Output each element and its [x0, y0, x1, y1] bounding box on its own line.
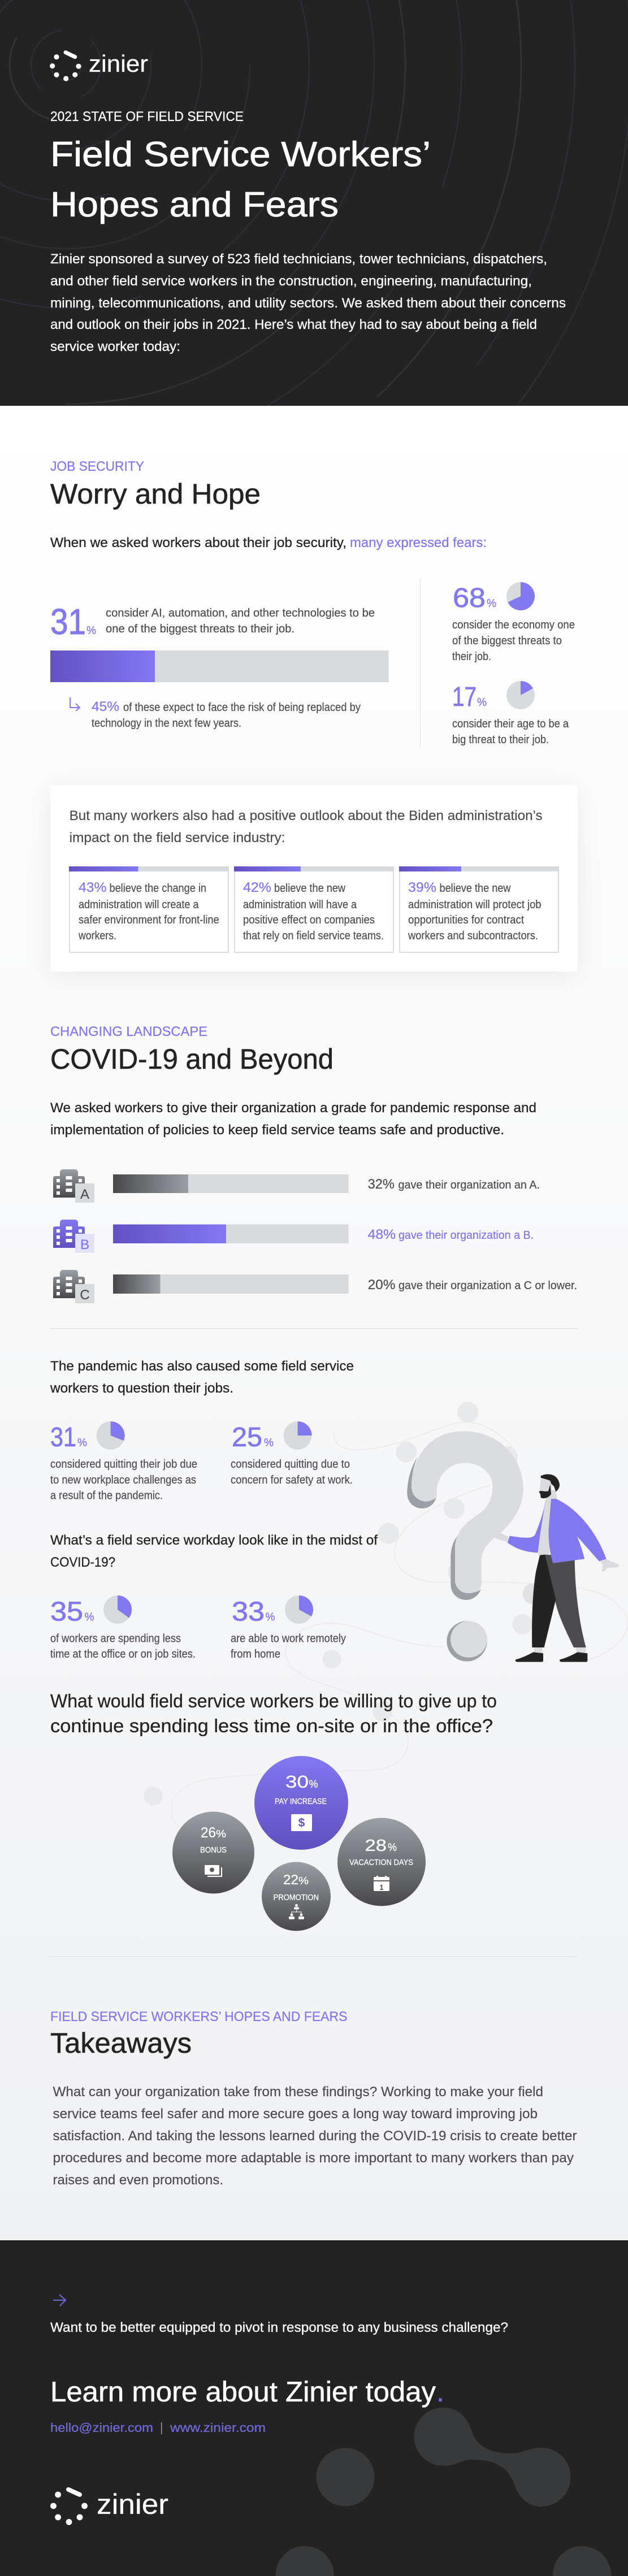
paragraph: satisfaction. And taking the lessons learned during the COVID-19 crisis to create better [53, 2128, 577, 2144]
subheading: workday: COVID-19? [50, 1555, 115, 1570]
stat: 68 percent [452, 582, 575, 663]
stat: 31 percent [50, 601, 375, 642]
stat: 17 percent [452, 681, 569, 746]
label: grade C: gave their organization a C or lower. [399, 1280, 577, 1292]
bubble: bonus: 26 [201, 1825, 216, 1841]
stat: 35 percent: % [85, 1611, 94, 1623]
bar chart: 31 percent [50, 650, 389, 682]
lead text: When we asked workers about their job security, [50, 535, 347, 550]
logo: zinier [50, 50, 148, 81]
section label: CHANGING LANDSCAPE [50, 1024, 207, 1039]
stat: 25 percent quitting: 25 [232, 1423, 262, 1452]
stat: 31 percent quitting: a result of the pandemic. [50, 1490, 163, 1502]
stat: 31 percent: 31 [50, 601, 86, 642]
intro paragraph: mining, telecommunications, and utility sectors. We asked them about their concerns [50, 296, 566, 311]
question mark [407, 1431, 523, 1662]
stat: 68 percent: 68 [453, 583, 486, 613]
section label: FIELD SERVICE WORKERS’ HOPES AND FEARS [50, 2009, 347, 2024]
stat: 68 percent: consider the economy one [452, 619, 575, 631]
stat: 31 percent quitting: % [77, 1437, 87, 1449]
stat: 68 percent: % [487, 597, 496, 610]
subheading: The pandemic has also caused some field service [50, 1359, 354, 1374]
panel: covid-19 and beyond [50, 1024, 578, 1329]
icon: cash [205, 1865, 222, 1876]
illustration: question mark and man [407, 1431, 619, 1662]
bubble: pay increase: PAY INCREASE [275, 1797, 327, 1806]
prompt text: Want to be better equipped to pivot in response to any business challenge? [50, 2320, 508, 2335]
bar: grade C [113, 1274, 349, 1294]
title: Hopes and Fears [50, 185, 339, 224]
icon: building grade B: B [80, 1237, 89, 1252]
label: grade B: 48% [368, 1227, 396, 1242]
logo: zinier: zinier [97, 2488, 168, 2520]
heading: What would field service workers be willing to give up to [50, 1690, 497, 1711]
pie: 25 percent [284, 1421, 312, 1450]
icon: building grade C: C [80, 1287, 90, 1303]
stat: 31 percent quitting: to new workplace challenges as [50, 1474, 196, 1486]
stat: 68 percent: of the biggest threats to [452, 635, 562, 647]
callout: 45 percent: 45% [92, 699, 119, 714]
label: grade C [368, 1277, 577, 1293]
icon: return arrow [70, 697, 80, 711]
pie: 31 percent [97, 1421, 125, 1450]
panel: footer call to action [0, 2240, 628, 2576]
card heading: impact on the field service industry: [70, 830, 285, 845]
subheading: workday [50, 1533, 378, 1570]
label: grade C: 20% [368, 1277, 396, 1293]
label: grade B [368, 1227, 534, 1242]
stat: 33 percent: from home [231, 1648, 280, 1660]
stat: 31 percent quitting [50, 1421, 197, 1502]
bubble: vacation days: 28 [365, 1837, 387, 1855]
sub-card: 39 percent: 39% [408, 880, 436, 895]
bubble: promotion: % [298, 1875, 309, 1887]
panel: job security [50, 459, 575, 747]
panel: pandemic job questions [50, 1359, 378, 1660]
icon: building grade A [53, 1169, 94, 1203]
sub-card: 43 percent: workers. [78, 930, 116, 942]
intro paragraph: and outlook on their jobs in 2021. Here’s what they had to say about being a field [50, 317, 537, 332]
bubble: pay increase: 30 [285, 1772, 309, 1792]
sub-card: 43 percent: administration will create a [79, 899, 199, 911]
icon: building grade B [53, 1220, 94, 1253]
intro paragraph: and other field service workers in the construction, engineering, manufacturing, [50, 274, 532, 289]
stat: 31 percent quitting: considered quitting their job due [50, 1458, 197, 1471]
stat: 17 percent: % [477, 696, 487, 709]
lead text [50, 1100, 536, 1138]
pie: 35 percent [103, 1595, 132, 1624]
sub-card: 42 percent: administration will have a [243, 899, 357, 911]
callout: 45 percent: technology in the next few years. [92, 717, 241, 730]
sub-card: 39 percent: believe the new [440, 882, 511, 895]
bubble: vacation days [337, 1818, 426, 1906]
heading [50, 1690, 497, 1736]
bubble: promotion: PROMOTION [274, 1893, 319, 1902]
sub-card: 43 percent: safer environment for front-line [79, 914, 219, 926]
decorative blobs [276, 2408, 611, 2576]
contact links: hello@zinier.com [50, 2421, 153, 2435]
subheading: workers to question their jobs. [50, 1381, 233, 1396]
label: grade A: gave their organization an A. [398, 1179, 540, 1191]
sub-card: 42 percent: positive effect on companies [243, 914, 375, 926]
stat: 35 percent: of workers are spending less [50, 1632, 181, 1645]
stat: 33 percent: are able to work remotely [231, 1632, 346, 1645]
label: grade B: gave their organization a B. [399, 1229, 534, 1242]
bar: grade A [113, 1174, 349, 1193]
title [50, 135, 431, 224]
stat: 17 percent: consider their age to be a [452, 718, 569, 730]
stat: 35 percent [50, 1595, 196, 1660]
sub-card: 39 percent: workers and subcontractors. [408, 930, 538, 942]
sub-card: 39 percent: opportunities for contract [408, 914, 524, 926]
icon: calendar [374, 1876, 389, 1892]
intro paragraph [50, 251, 566, 354]
sub-card: 42 percent [234, 866, 394, 952]
intro paragraph: service worker today: [50, 339, 180, 354]
paragraph [53, 2084, 577, 2188]
heading: . [436, 2376, 444, 2408]
stat: 35 percent: time at the office or on job sites. [50, 1648, 196, 1660]
bubble: promotion: 22 [283, 1872, 298, 1888]
paragraph: What can your organization take from these findings? Working to make your field [53, 2084, 543, 2100]
icon: arrow [53, 2295, 66, 2306]
stat: 17 percent: 17 [452, 682, 477, 712]
pie: 17 percent [506, 681, 535, 709]
stat: 33 percent: % [266, 1611, 275, 1623]
panel: what workers would give up [50, 1690, 578, 1957]
lead text: implementation of policies to keep field service teams safe and productive. [50, 1122, 504, 1138]
subheading: workday: What’s a field service workday look like in the midst of [50, 1533, 378, 1548]
sub-card: 42 percent: believe the new [274, 882, 346, 895]
bar: grade B [113, 1224, 349, 1243]
icon: dollar: $ [298, 1816, 305, 1829]
bubble: pay increase [254, 1756, 348, 1850]
eyebrow: 2021 STATE OF FIELD SERVICE [50, 109, 244, 124]
stat: 33 percent: 33 [232, 1597, 265, 1627]
stat: 31 percent quitting: 31 [50, 1423, 76, 1452]
intro paragraph: Zinier sponsored a survey of 523 field technicians, tower technicians, dispatchers, [50, 251, 547, 267]
bubble: promotion [262, 1862, 331, 1931]
stat: 31 percent: % [86, 625, 96, 637]
subheading [50, 1359, 354, 1396]
heading: Takeaways [50, 2027, 192, 2059]
sub-card: 43 percent: believe the change in [110, 882, 206, 895]
paragraph: procedures and become more adaptable is more important to many workers than pay [53, 2150, 574, 2166]
heading: continue spending less time on-site or in the office? [50, 1715, 493, 1736]
card heading [70, 808, 543, 845]
label: grade A [368, 1177, 540, 1192]
heading: Learn more about Zinier today [50, 2376, 436, 2408]
sub-card: 43 percent: 43% [79, 880, 106, 895]
heading: COVID-19 and Beyond [50, 1043, 334, 1075]
panel: takeaways [50, 2009, 577, 2188]
icon: calendar: 1 [379, 1883, 384, 1892]
logo: zinier [50, 2488, 168, 2525]
stat: 35 percent: 35 [50, 1597, 83, 1627]
title: Field Service Workers’ [50, 135, 431, 174]
bubble: bonus [172, 1812, 254, 1893]
label: grade A: 32% [368, 1177, 395, 1192]
contact links [50, 2421, 266, 2435]
sub-card: 39 percent: administration will protect job [408, 899, 542, 911]
page background [0, 406, 628, 2240]
bubble: bonus: BONUS [200, 1845, 227, 1855]
stat: 68 percent: their job. [452, 650, 491, 663]
bubble: pay increase: % [309, 1779, 318, 1790]
panel: positive outlook card [50, 785, 578, 972]
sub-card: 39 percent [399, 866, 559, 952]
background decoration: connecting lines [144, 1402, 628, 1827]
stat: 33 percent [231, 1595, 346, 1660]
callout: 45 percent [92, 699, 361, 730]
icon: building grade A: A [80, 1187, 89, 1202]
stat: 31 percent: one of the biggest threats to their job. [106, 623, 294, 635]
pie: 68 percent [506, 582, 535, 610]
stat: 25 percent quitting: considered quitting due to [231, 1458, 350, 1471]
sub-card: 42 percent: 42% [243, 880, 271, 895]
logo: zinier: zinier [89, 50, 148, 77]
stat: 17 percent: big threat to their job. [452, 734, 549, 746]
bubble: vacation days: % [388, 1842, 397, 1854]
paragraph: raises and even promotions. [53, 2172, 223, 2188]
pie: 33 percent [285, 1595, 313, 1624]
stat: 25 percent quitting: % [264, 1437, 274, 1449]
paragraph: service teams feel safer and more secure goes a long way toward improving job [53, 2106, 538, 2122]
heading: Worry and Hope [50, 478, 261, 510]
lead text: many expressed fears: [350, 535, 487, 550]
icon: dollar [291, 1814, 312, 1831]
panel: hero header [0, 0, 628, 406]
card heading: But many workers also had a positive outlook about the Biden administration’s [70, 808, 543, 823]
callout: 45 percent: of these expect to face the risk of being replaced by [123, 701, 361, 714]
icon: building grade C [53, 1270, 94, 1303]
stat: 31 percent: consider AI, automation, and other technologies to be [106, 607, 375, 619]
bubble: bonus: % [216, 1828, 226, 1840]
icon: org chart [289, 1904, 304, 1919]
lead text [50, 535, 487, 550]
stat: 25 percent quitting [231, 1421, 353, 1486]
man [495, 1474, 619, 1662]
bubble: vacation days: VACACTION DAYS [349, 1858, 413, 1867]
contact links: www.zinier.com [170, 2421, 266, 2435]
lead text: We asked workers to give their organization a grade for pandemic response and [50, 1100, 536, 1116]
stat: 25 percent quitting: concern for safety at work. [231, 1474, 353, 1486]
sub-card: 42 percent: that rely on field service teams. [243, 930, 384, 942]
section label: JOB SECURITY [50, 459, 144, 474]
sub-card: 43 percent [69, 866, 229, 952]
